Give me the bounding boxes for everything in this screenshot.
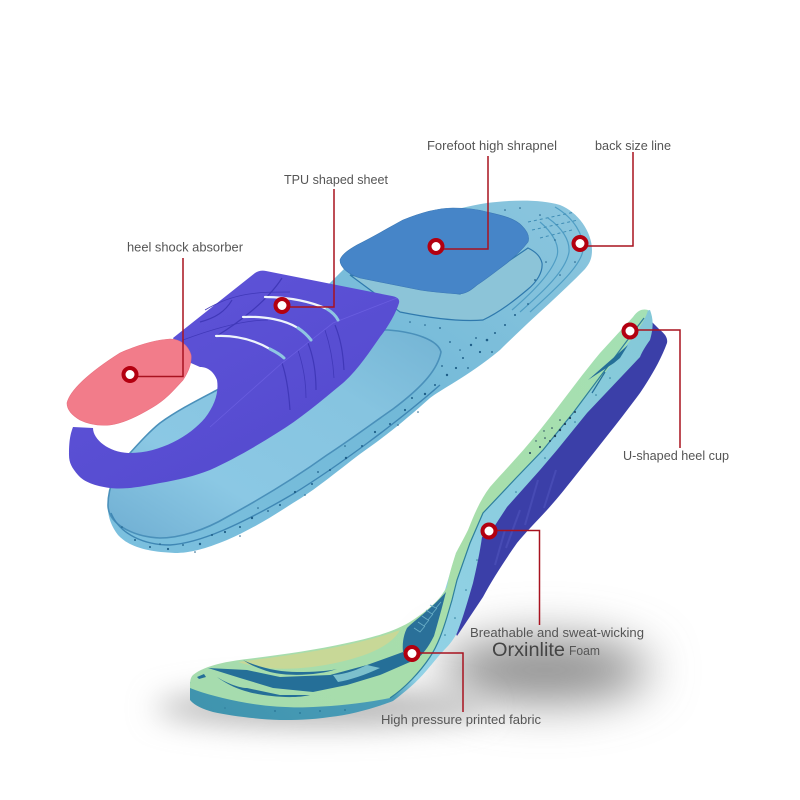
size contour lines: [512, 207, 583, 312]
callout: U-shaped heel cup: U-shaped heel cup: [623, 448, 729, 463]
forefoot recess: [350, 248, 542, 321]
panel: heel shock absorber pad: [67, 339, 191, 425]
callout: Forefoot high shrapnel: [427, 138, 557, 253]
panel: TPU shaped sheet: [69, 271, 399, 489]
callout: TPU shaped sheet: TPU shaped sheet: [284, 172, 388, 187]
callout: TPU shaped sheet: [276, 172, 388, 312]
shadow under side insole: [155, 638, 650, 726]
perforation dots: [529, 411, 576, 454]
callout: back size line: [574, 138, 671, 250]
callout: back size line: back size line: [595, 138, 671, 153]
panel: forefoot high shrapnel pad: [340, 208, 529, 294]
callout: breathable foam: [470, 524, 644, 661]
printed pattern forefoot: [197, 652, 410, 697]
foam layer: [190, 310, 653, 720]
heel recess: [108, 330, 441, 538]
navy heel cup layer: [450, 322, 667, 636]
white slots: [216, 297, 338, 358]
printed pattern arch: [403, 592, 446, 658]
callout: High pressure printed fabric: [381, 647, 541, 727]
callout: breathable foam: Orxinlite: [492, 640, 565, 661]
embossed size marks: [528, 212, 578, 238]
dark seam: [390, 318, 644, 698]
foam base layer: [108, 201, 592, 553]
callout: breathable foam: Breathable and sweat-wicking: [470, 625, 644, 640]
chevrons: [414, 602, 441, 632]
green fabric top: [190, 310, 648, 707]
exploded insole: [67, 201, 592, 553]
callout: heel shock absorber: heel shock absorber: [127, 240, 244, 254]
navy ribs: [495, 470, 556, 565]
callout: U-shaped heel cup: [623, 324, 729, 463]
ridge highlight: [210, 298, 397, 427]
yellow tint: [238, 630, 400, 669]
callout: breathable foam: Foam: [569, 643, 600, 658]
foam speckles side: [224, 377, 611, 714]
callout: High pressure printed fabric: High pressure printed fabric: [381, 712, 541, 727]
grooves: [183, 278, 344, 410]
callout: Forefoot high shrapnel: Forefoot high shrapnel: [427, 138, 557, 153]
callout: heel shock absorber: [124, 240, 244, 381]
side view insole: [190, 310, 667, 720]
rim line: [111, 385, 440, 545]
heel pattern: [588, 345, 628, 380]
foam speckles: [121, 207, 576, 553]
